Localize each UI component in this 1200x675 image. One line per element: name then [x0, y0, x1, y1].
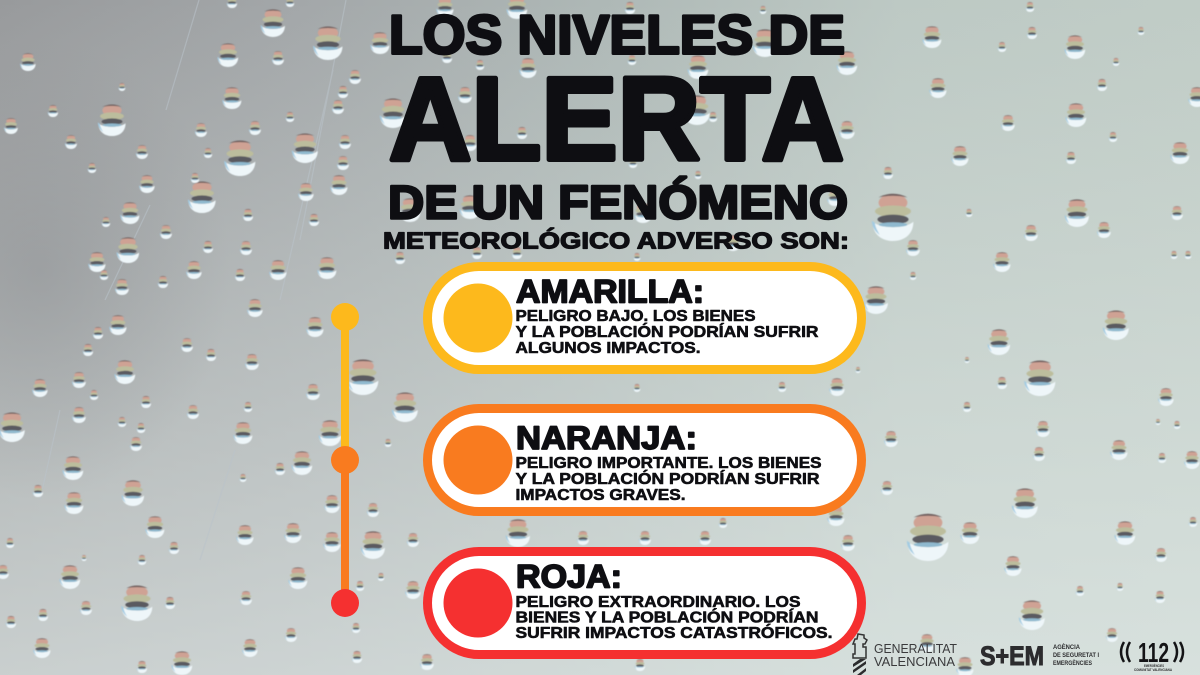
panel: amarilla: ALGUNOS IMPACTOS. [516, 340, 700, 357]
panel: amarilla: Y LA POBLACIÓN PODRÍAN SUFRIR [516, 323, 818, 341]
panel: naranja: NARANJA: [516, 420, 697, 456]
panel: roja: SUFRIR IMPACTOS CATASTRÓFICOS. [516, 624, 832, 642]
logo: 112 emergencies: COMUNITAT VALENCIANA [1134, 668, 1172, 672]
panel: roja [428, 552, 862, 654]
logo: 112 emergencies: 112 [1138, 637, 1169, 668]
panel: roja: BIENES Y LA POBLACIÓN PODRÍAN [516, 608, 818, 626]
panel: naranja: Y LA POBLACIÓN PODRÍAN SUFRIR [516, 470, 820, 488]
logo: S+EM agency: DE SEGURETAT I [1053, 652, 1099, 659]
panel: roja: PELIGRO EXTRAORDINARIO. LOS [516, 594, 800, 611]
logo: 112 emergencies: EMERGÈNCIES [1144, 663, 1165, 668]
logo: 112 emergencies [1121, 637, 1183, 672]
panel: naranja: PELIGRO IMPORTANTE. LOS BIENES [516, 455, 822, 472]
panel: naranja: IMPACTOS GRAVES. [516, 487, 686, 504]
logo: Generalitat Valenciana: VALENCIANA [874, 655, 956, 669]
panel: amarilla [428, 266, 862, 370]
panel: amarilla: PELIGRO BAJO. LOS BIENES [516, 308, 756, 325]
logo: S+EM agency: AGÈNCIA [1053, 642, 1080, 651]
title: METEOROLÓGICO ADVERSO SON: [383, 226, 849, 254]
title [383, 4, 849, 254]
logo: S+EM agency [980, 641, 1099, 671]
alert timeline [331, 303, 359, 617]
title: ALERTA [389, 54, 844, 186]
title: LOS NIVELES DE [389, 4, 845, 66]
title: DE UN FENÓMENO [388, 176, 848, 228]
logo: Generalitat Valenciana: GENERALITAT [874, 642, 957, 656]
logo: Generalitat Valenciana [853, 634, 957, 675]
logo: S+EM agency: EMERGÈNCIES [1053, 658, 1093, 667]
panel: amarilla: AMARILLA: [516, 274, 704, 310]
panel: roja: ROJA: [516, 558, 622, 594]
logo: S+EM agency: S+EM [980, 641, 1044, 671]
panel: naranja [428, 408, 862, 512]
